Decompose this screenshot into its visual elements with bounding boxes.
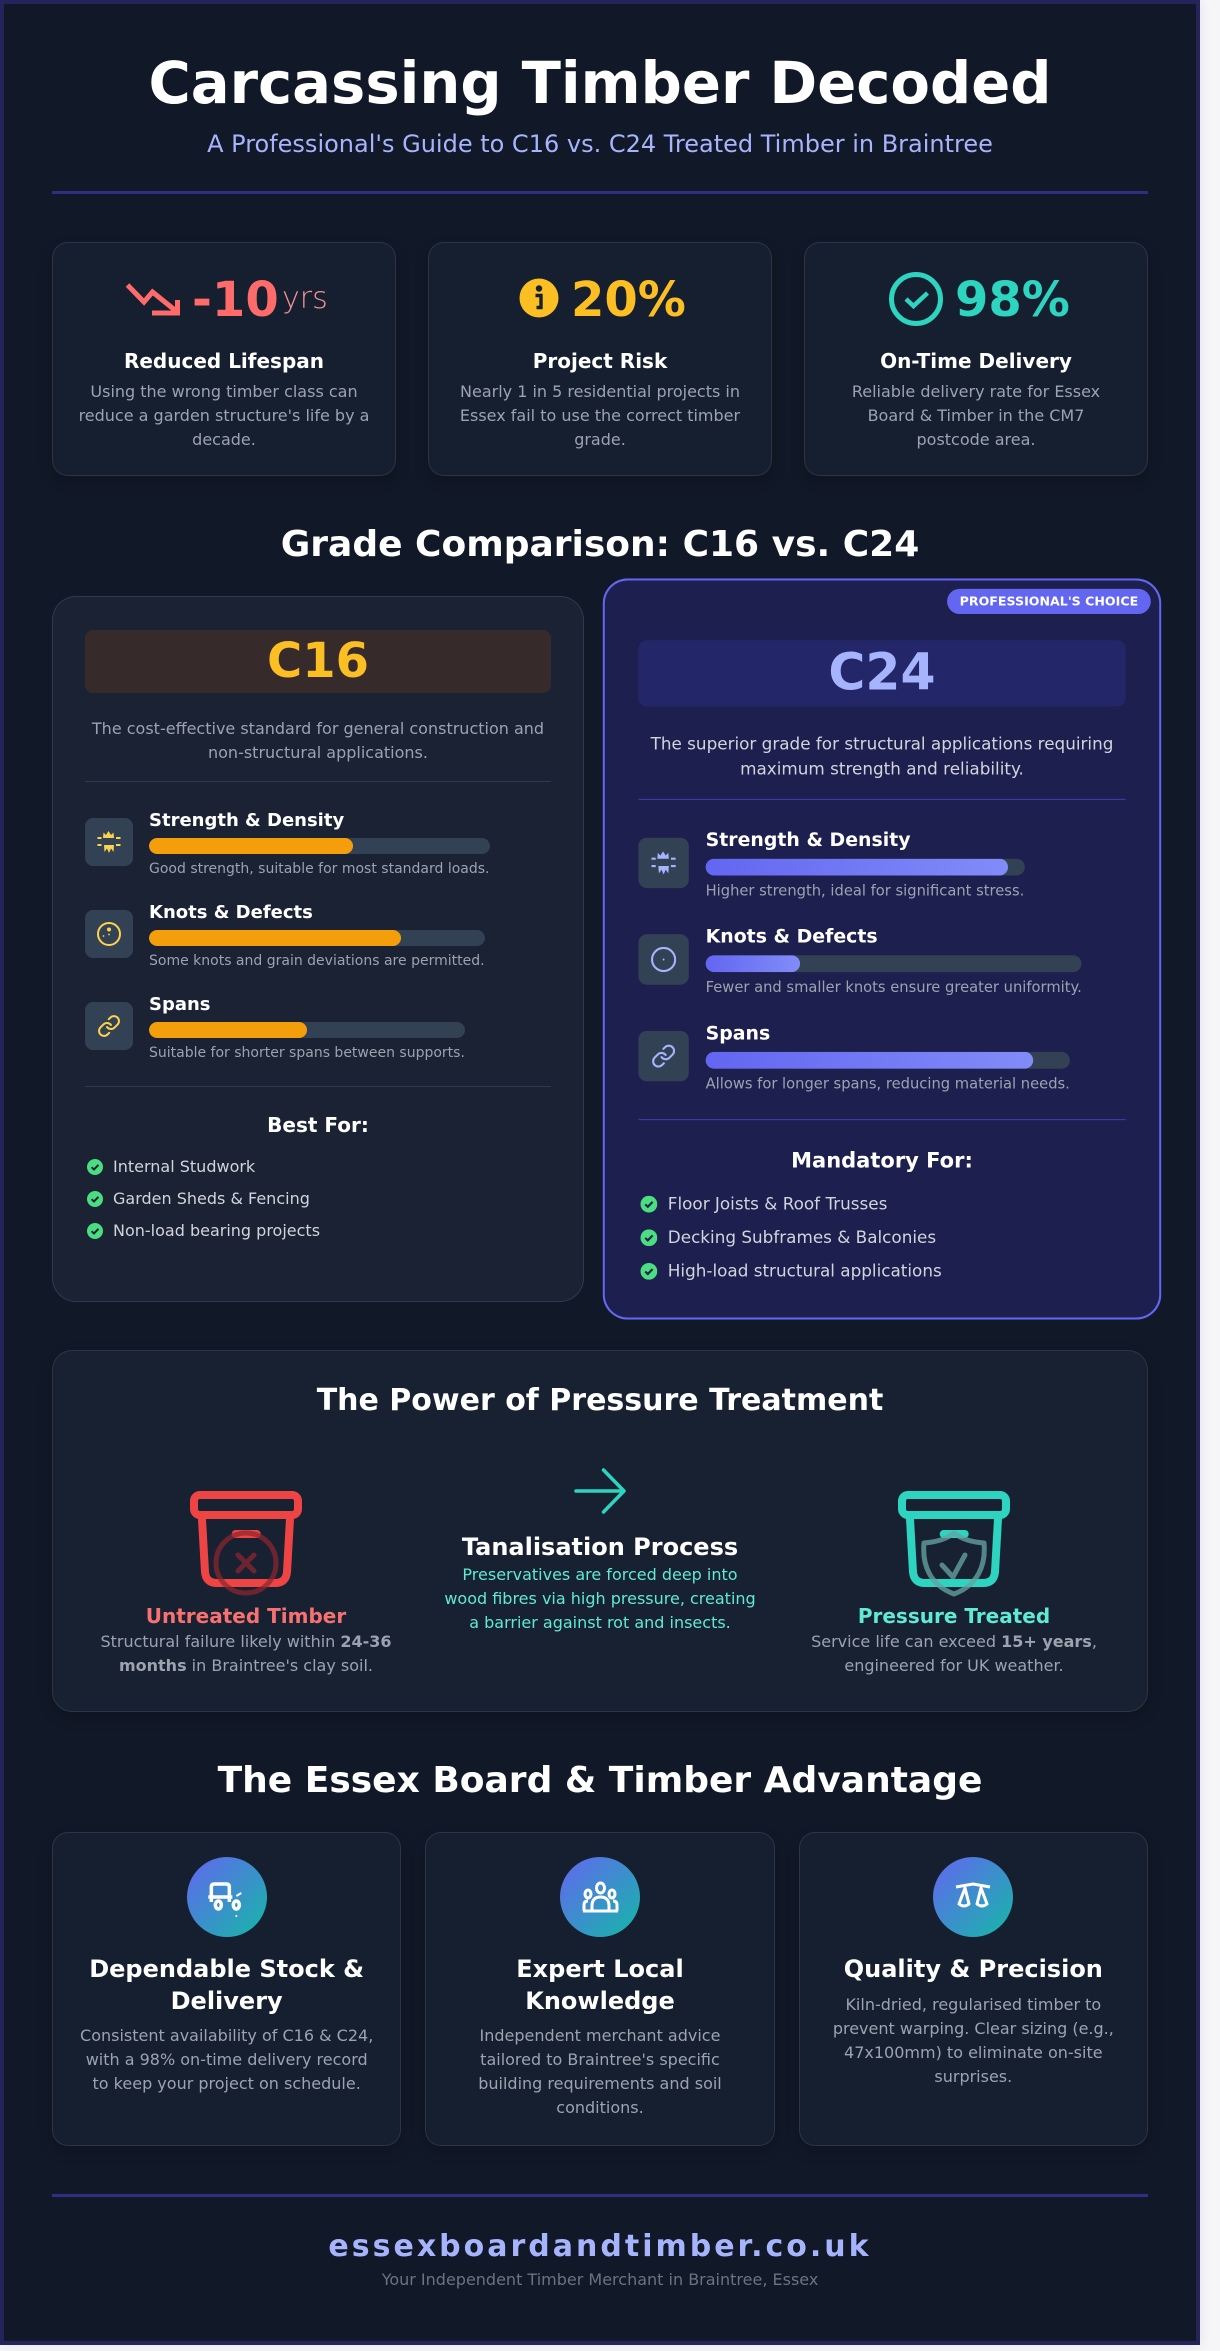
metric: knots and defects: Knots & Defects — [149, 902, 313, 923]
metric: knots and defects — [706, 926, 1082, 996]
card title: Expert Local — [516, 1955, 684, 1983]
grade description: maximum strength and reliability. — [740, 759, 1024, 779]
grade label C24 — [638, 640, 1126, 706]
panel: local knowledge — [425, 1832, 775, 2146]
card description: building requirements and soil — [478, 2074, 722, 2093]
card description: tailored to Braintree's specific — [480, 2050, 720, 2069]
metric: spans: Allows for longer spans, reducing material needs. — [706, 1076, 1070, 1093]
panel: stat on-time delivery — [804, 242, 1148, 476]
metric: spans — [706, 1022, 1070, 1093]
card description — [478, 2026, 722, 2117]
metric: spans: Spans — [149, 994, 211, 1015]
stat description: Reliable delivery rate for Essex — [852, 382, 1100, 401]
icon: strength — [85, 818, 133, 866]
metric: strength and density: Strength & Density — [149, 810, 344, 831]
description: months in Braintree's clay soil. — [119, 1656, 373, 1675]
card description: Kiln-dried, regularised timber to — [845, 1995, 1101, 2014]
stat description: decade. — [192, 430, 256, 449]
list item: Floor Joists & Roof Trusses — [668, 1194, 887, 1214]
stat number: 98% — [955, 272, 1070, 328]
description: Structural failure likely within 24-36 — [100, 1632, 392, 1651]
icon: truck — [187, 1857, 267, 1937]
card title: Delivery — [171, 1987, 283, 2015]
heading: grade comparison: Grade Comparison: C16 vs. C24 — [281, 524, 919, 565]
card description: with a 98% on-time delivery record — [86, 2050, 368, 2069]
stat description: reduce a garden structure's life by a — [79, 406, 369, 425]
list item: Internal Studwork — [113, 1157, 255, 1176]
arrow — [574, 1468, 626, 1514]
heading: advantage: The Essex Board & Timber Advantage — [218, 1760, 982, 1801]
process description: Preservatives are forced deep into — [462, 1565, 738, 1584]
list heading: Best For: — [267, 1113, 369, 1137]
heading: power of pressure treatment: The Power of Pressure Treatment — [317, 1383, 883, 1418]
stat description — [79, 382, 369, 449]
card description — [833, 1995, 1114, 2086]
description: Service life can exceed 15+ years, — [811, 1632, 1097, 1651]
icon: info circle — [520, 278, 558, 318]
subtitle: A Professional's Guide to C16 vs. C24 Treated Timber in Braintree — [207, 130, 993, 158]
grade description — [650, 734, 1113, 779]
metric: knots and defects: Knots & Defects — [706, 926, 878, 948]
icon: knots — [638, 934, 689, 985]
list item: Garden Sheds & Fencing — [113, 1189, 310, 1208]
icon: spans link — [638, 1031, 689, 1081]
process description: a barrier against rot and insects. — [469, 1613, 731, 1632]
metric: strength and density — [706, 829, 1025, 900]
icon: scales — [933, 1857, 1013, 1937]
footer website: essexboardandtimber.co.uk — [328, 2229, 872, 2264]
panel: C24 grade — [603, 578, 1161, 1320]
metric: knots and defects — [149, 902, 485, 969]
stat description — [852, 382, 1100, 449]
panel: stat reduced lifespan — [52, 242, 396, 476]
label: Pressure Treated — [858, 1604, 1050, 1628]
metric: strength and density: Higher strength, ideal for significant stress. — [706, 883, 1024, 900]
icon: untreated box with cross — [190, 1491, 302, 1596]
process description: wood fibres via high pressure, creating — [444, 1589, 756, 1608]
grade description: The superior grade for structural applications requiring — [651, 734, 1113, 754]
stat title: Project Risk — [533, 349, 667, 373]
icon: strength — [638, 838, 689, 888]
badge: professional's choice — [947, 589, 1151, 614]
column: tanalisation process — [444, 1468, 756, 1632]
stat number: 20% — [571, 272, 686, 328]
description: engineered for UK weather. — [844, 1656, 1064, 1675]
list heading: Mandatory For: — [791, 1147, 973, 1173]
icon: spans link — [85, 1002, 133, 1050]
card title — [516, 1955, 684, 2015]
stat unit: yrs — [282, 281, 328, 316]
stat description: Nearly 1 in 5 residential projects in — [460, 382, 740, 401]
stat description: grade. — [574, 430, 626, 449]
card description: conditions. — [556, 2098, 644, 2117]
grade label C16 — [85, 630, 551, 693]
list item: Non-load bearing projects — [113, 1221, 320, 1240]
column: pressure treated — [811, 1491, 1097, 1675]
card description: surprises. — [934, 2067, 1012, 2086]
stat number: -10 — [192, 272, 279, 328]
panel: stat project risk — [428, 242, 772, 476]
icon: trending down arrow — [126, 283, 180, 316]
card title: Knowledge — [525, 1987, 675, 2015]
metric: strength and density: Strength & Density — [706, 829, 911, 851]
badge: professional's choice: PROFESSIONAL'S CHOICE — [960, 594, 1138, 609]
panel: pressure treatment — [52, 1350, 1148, 1712]
title: Carcassing Timber Decoded — [148, 50, 1052, 117]
grade label C16: C16 — [267, 633, 369, 689]
card title — [89, 1955, 364, 2015]
metric: spans: Suitable for shorter spans between supports. — [149, 1045, 465, 1061]
metric: spans — [149, 994, 465, 1061]
list item: High-load structural applications — [668, 1261, 942, 1281]
icon: people — [560, 1857, 640, 1937]
card description: Consistent availability of C16 & C24, — [80, 2026, 373, 2045]
card description: prevent warping. Clear sizing (e.g., — [833, 2019, 1114, 2038]
grade description — [92, 719, 544, 762]
card description — [80, 2026, 373, 2093]
metric: strength and density — [149, 810, 490, 877]
process heading: Tanalisation Process — [462, 1533, 738, 1561]
stat description: Using the wrong timber class can — [90, 382, 358, 401]
label: Untreated Timber — [146, 1604, 346, 1628]
metric: strength and density: Good strength, suitable for most standard loads. — [149, 861, 490, 877]
stat title: On-Time Delivery — [880, 349, 1072, 373]
footer tagline: Your Independent Timber Merchant in Braintree, Essex — [382, 2270, 818, 2289]
stat description: postcode area. — [916, 430, 1036, 449]
metric: spans: Spans — [706, 1022, 770, 1045]
description — [811, 1632, 1097, 1675]
icon: knots — [85, 910, 133, 958]
grade description: non-structural applications. — [208, 743, 428, 762]
process description — [444, 1565, 756, 1632]
card description: Independent merchant advice — [480, 2026, 720, 2045]
stat description: Board & Timber in the CM7 — [868, 406, 1084, 425]
metric: knots and defects: Fewer and smaller knots ensure greater uniformity. — [706, 979, 1082, 996]
icon: treated box with shield — [898, 1491, 1010, 1596]
card description: 47x100mm) to eliminate on-site — [844, 2043, 1103, 2062]
stat description — [460, 382, 740, 449]
card title: Dependable Stock & — [89, 1955, 364, 1983]
stat description: Essex fail to use the correct timber — [460, 406, 740, 425]
icon: check circle — [889, 272, 943, 326]
stat title: Reduced Lifespan — [124, 349, 324, 373]
metric: knots and defects: Some knots and grain deviations are permitted. — [149, 953, 485, 969]
card description: to keep your project on schedule. — [93, 2074, 361, 2093]
grade description: The cost-effective standard for general construction and — [92, 719, 544, 738]
card title: Quality & Precision — [844, 1955, 1103, 1983]
list item: Decking Subframes & Balconies — [668, 1227, 936, 1247]
panel: C16 grade — [52, 596, 584, 1302]
grade label C24: C24 — [828, 643, 936, 702]
description — [100, 1632, 392, 1675]
panel: stock and delivery — [52, 1832, 401, 2146]
panel: quality and precision — [799, 1832, 1148, 2146]
column: untreated timber — [100, 1491, 392, 1675]
